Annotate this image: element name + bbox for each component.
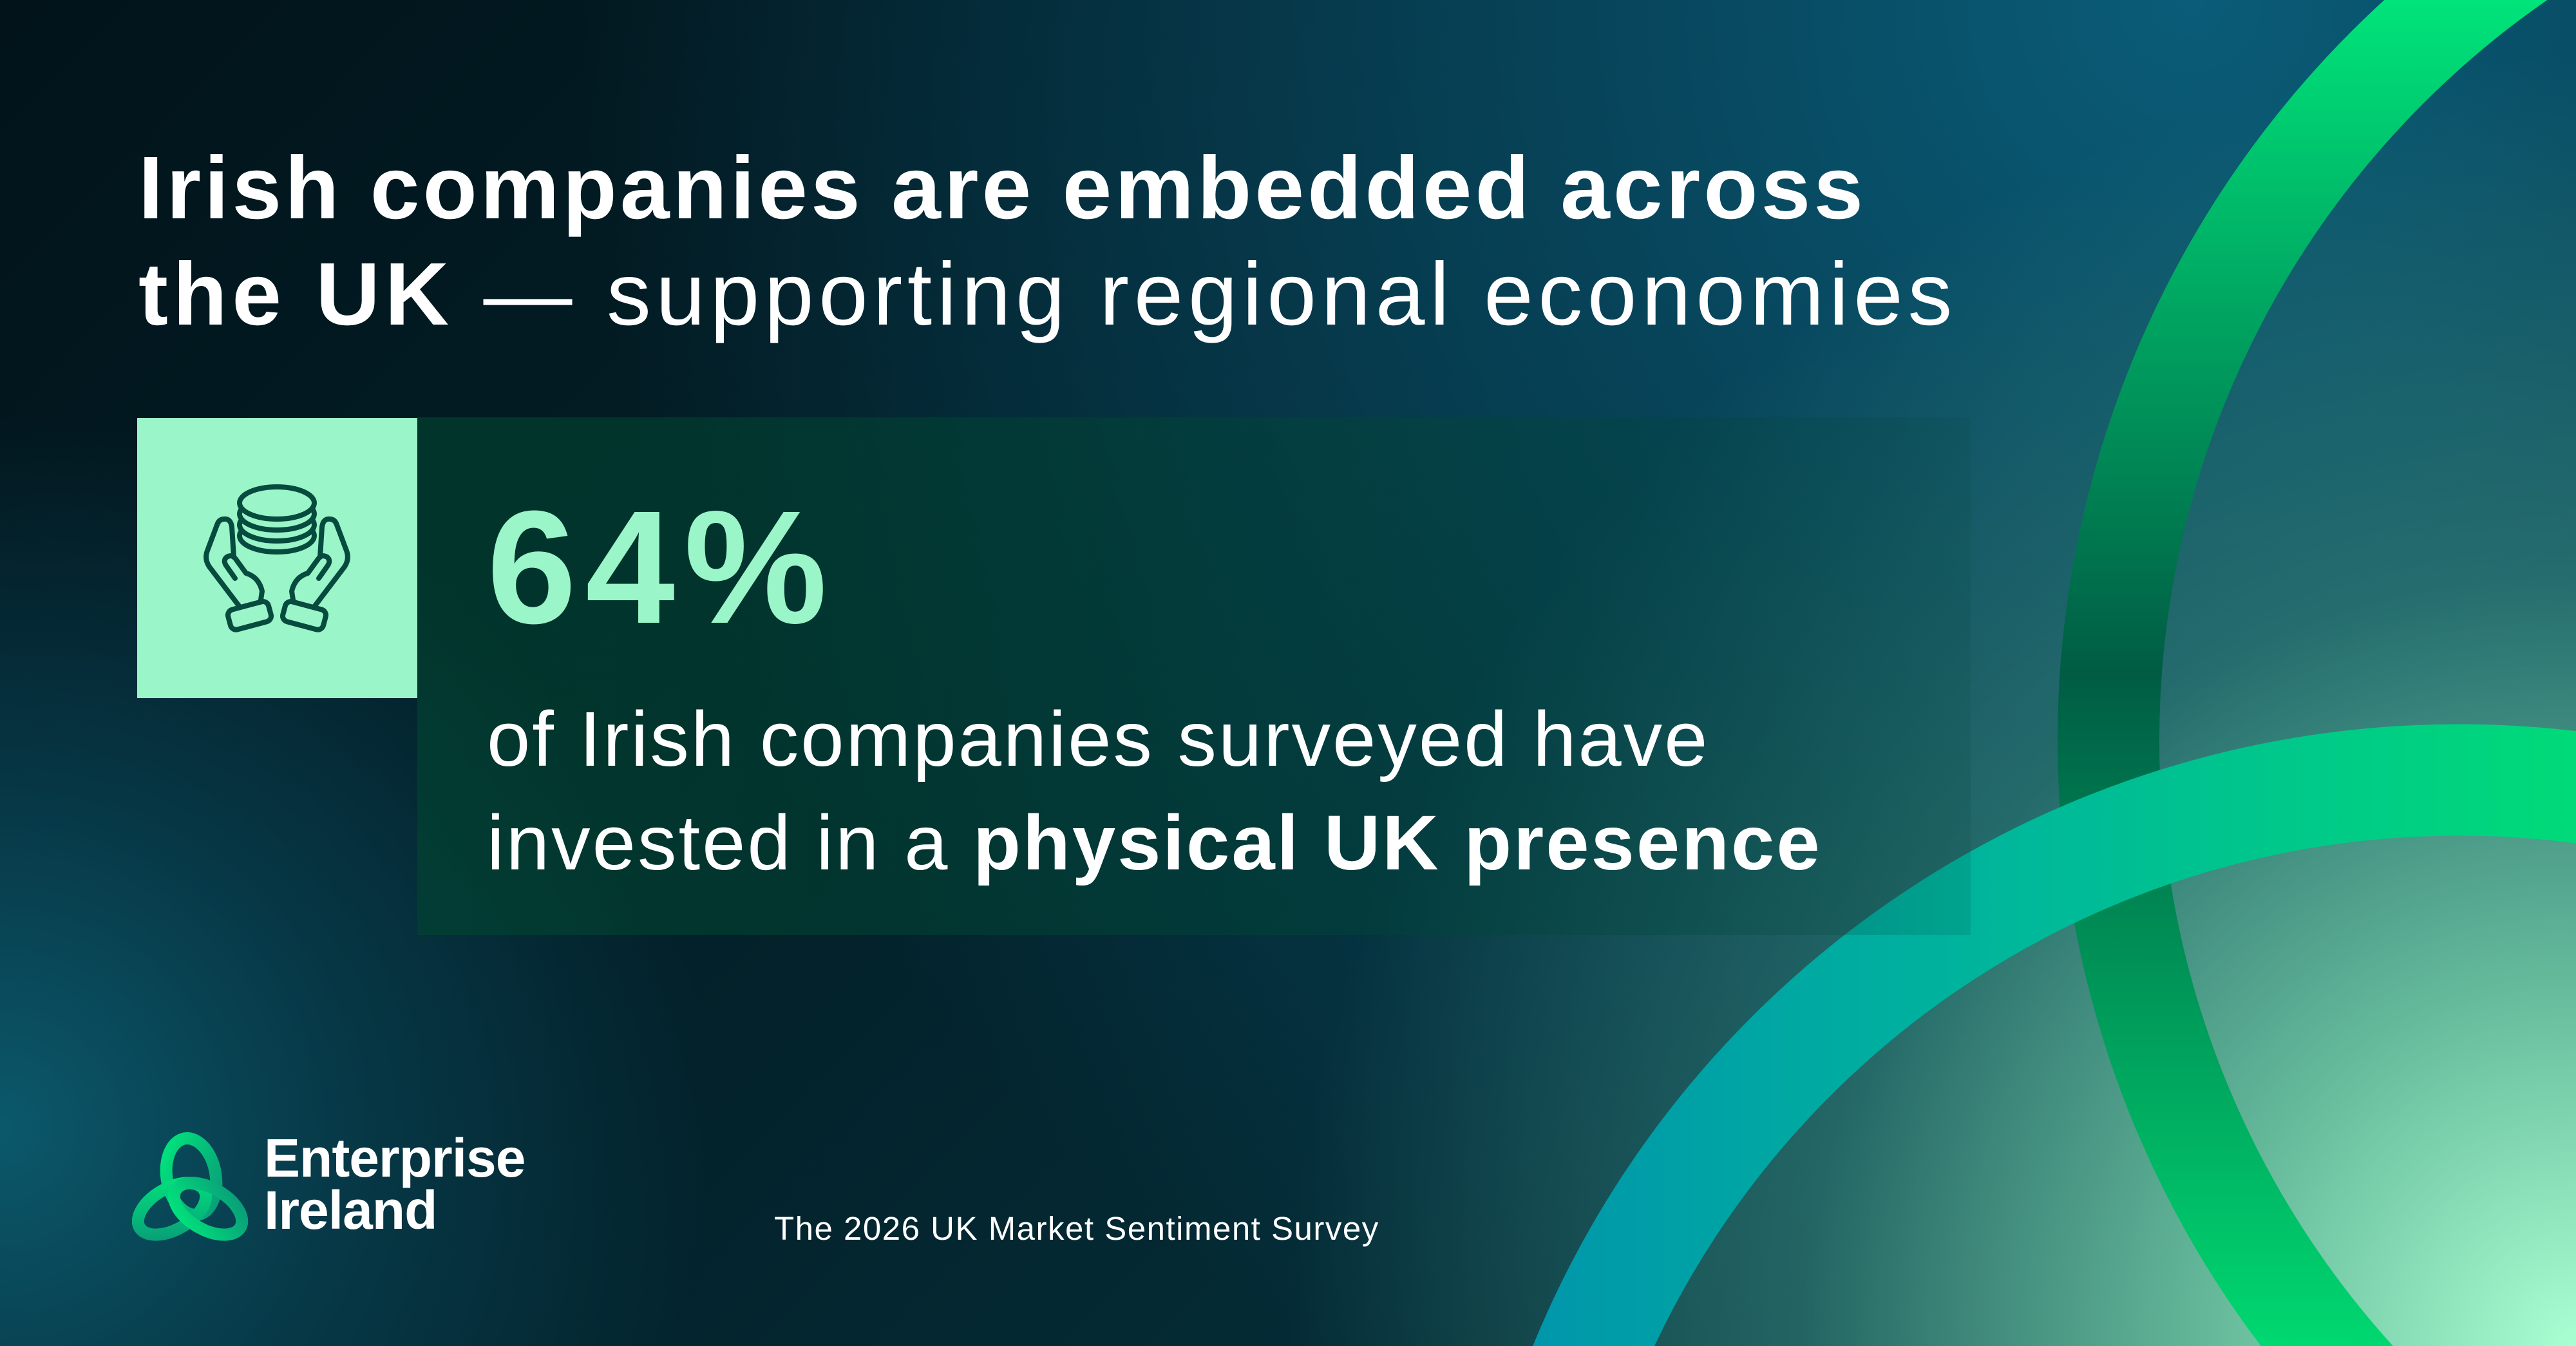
title: Irish companies are embedded across — [138, 138, 1866, 238]
ring: teal arc — [1514, 780, 2576, 1346]
logo symbol — [132, 1132, 249, 1241]
footer source: The 2026 UK Market Sentiment Survey — [774, 1210, 1379, 1247]
stat description — [487, 695, 1822, 886]
logo wordmark: Ireland — [264, 1180, 437, 1240]
title — [138, 138, 1957, 344]
title: the UK — supporting regional economies — [138, 245, 1957, 344]
ring: vertical green arc — [2108, 0, 2576, 1346]
panel: stat — [417, 417, 1971, 935]
stat number: 64% — [487, 477, 836, 657]
logo: Enterprise Ireland — [132, 1128, 526, 1241]
stat description: of Irish companies surveyed have — [487, 695, 1709, 782]
icon: hands holding coins — [137, 418, 417, 698]
logo wordmark — [264, 1128, 526, 1240]
stat description: invested in a physical UK presence — [487, 799, 1822, 886]
logo wordmark: Enterprise — [264, 1128, 526, 1188]
